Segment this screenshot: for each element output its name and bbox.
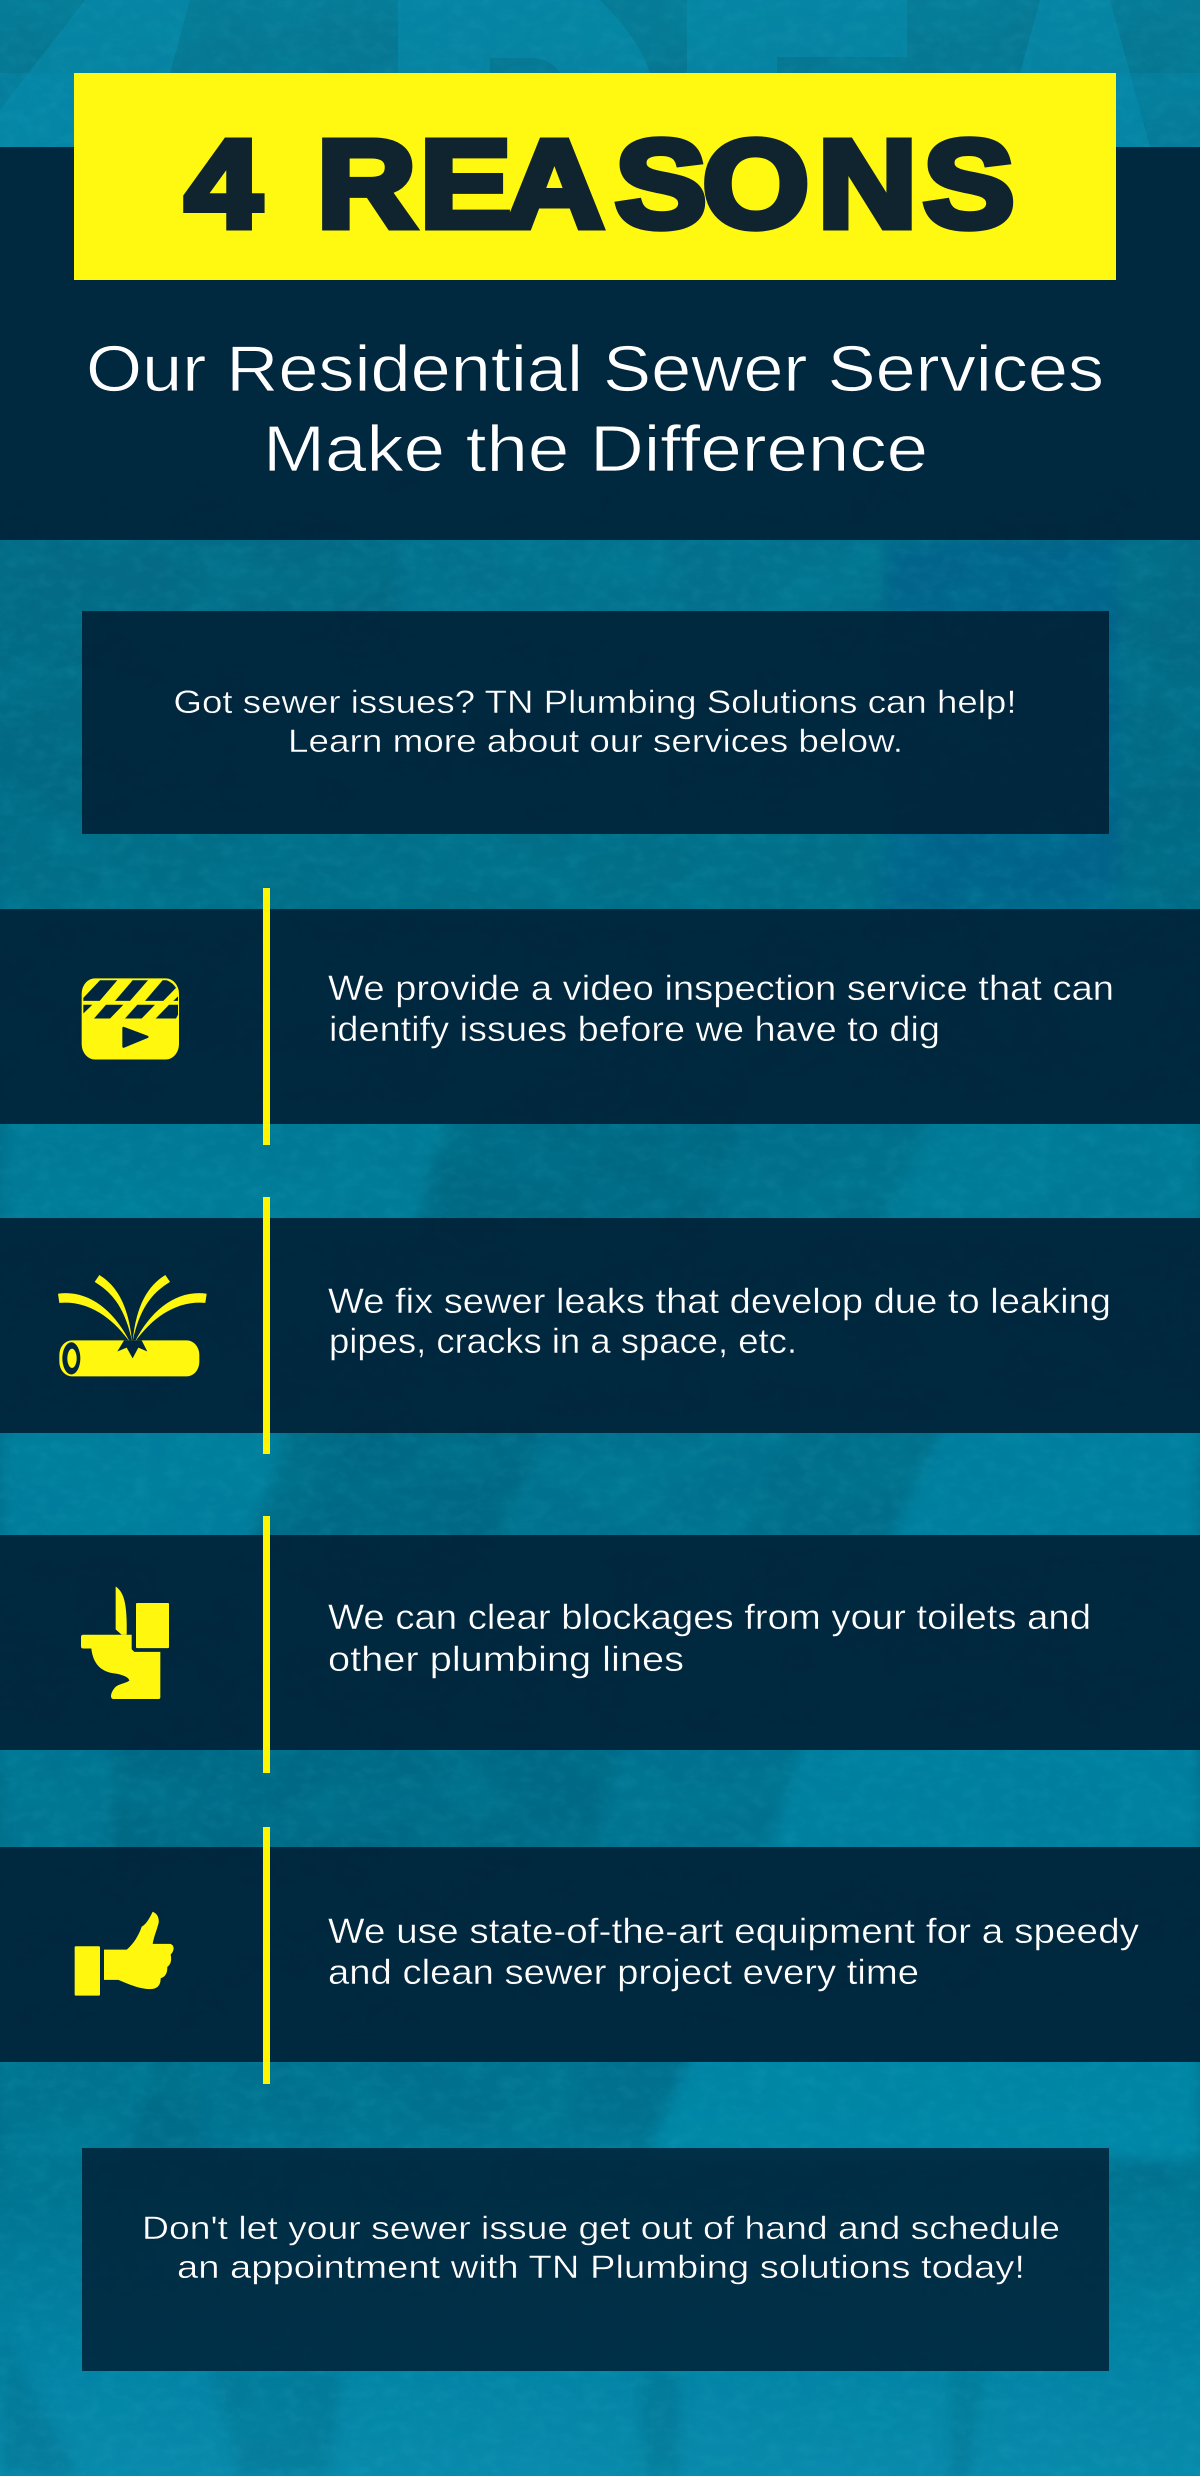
icon: thumbs up bbox=[75, 1912, 174, 1996]
text: row 3: We can clear blockages from your toilets and bbox=[328, 1598, 1091, 1637]
bluer panel at right of the upper gap bbox=[885, 540, 1120, 909]
row 1: video inspection bbox=[0, 888, 1200, 1145]
text: row 1 bbox=[328, 969, 1114, 1049]
row 2: sewer leaks bbox=[0, 1197, 1200, 1454]
text: row 3 bbox=[328, 1598, 1091, 1679]
panel: intro callout: Learn more about our services below. bbox=[288, 723, 903, 759]
text: row 2: We fix sewer leaks that develop due to leaking bbox=[328, 1282, 1111, 1321]
panel: closing callout bbox=[82, 2148, 1109, 2371]
gap 1750-1847 bbox=[0, 1736, 110, 1860]
gap 1433-1535 bbox=[0, 1420, 288, 1548]
header band bbox=[0, 147, 1200, 540]
icon: video clapper bbox=[82, 978, 179, 1059]
text: row 2 bbox=[328, 1282, 1111, 1361]
divider bar 1 bbox=[263, 888, 270, 1145]
subtitle: Our Residential Sewer Services bbox=[86, 332, 1104, 405]
panel: closing callout: an appointment with TN Plumbing solutions today! bbox=[177, 2249, 1025, 2285]
text: row 4: and clean sewer project every time bbox=[328, 1953, 919, 1992]
text: row 1: identify issues before we have to dig bbox=[329, 1010, 940, 1049]
panel: closing callout: Don't let your sewer issue get out of hand and schedule bbox=[142, 2210, 1060, 2246]
divider bar 3 bbox=[263, 1516, 270, 1773]
text: row 4 bbox=[328, 1912, 1140, 1992]
text: row 2: pipes, cracks in a space, etc. bbox=[329, 1322, 797, 1361]
panel: intro callout bbox=[82, 611, 1109, 834]
icon: toilet bbox=[81, 1586, 169, 1699]
row 3: blockages bbox=[0, 1516, 1200, 1773]
subtitle bbox=[86, 332, 1104, 485]
title block: 4 REASONS bbox=[74, 73, 1116, 280]
title text: 4 REASONS bbox=[185, 114, 1015, 254]
divider bar 2 bbox=[263, 1197, 270, 1454]
icon: leaking pipe bbox=[58, 1275, 207, 1376]
row 4: equipment bbox=[0, 1827, 1200, 2084]
gap 2062-2148 bbox=[0, 2048, 160, 2160]
text: row 4: We use state-of-the-art equipment for a speedy bbox=[328, 1912, 1140, 1951]
gap 1124-1218 bbox=[0, 1110, 446, 1232]
subtitle: Make the Difference bbox=[263, 412, 928, 485]
panel: intro callout: Got sewer issues? TN Plumbing Solutions can help! bbox=[174, 684, 1016, 720]
text: row 1: We provide a video inspection service that can bbox=[328, 969, 1114, 1008]
text: row 3: other plumbing lines bbox=[328, 1640, 684, 1679]
gap 540-611 bbox=[400, 530, 885, 620]
gap 834-909 bbox=[0, 820, 880, 920]
divider bar 4 bbox=[263, 1827, 270, 2084]
